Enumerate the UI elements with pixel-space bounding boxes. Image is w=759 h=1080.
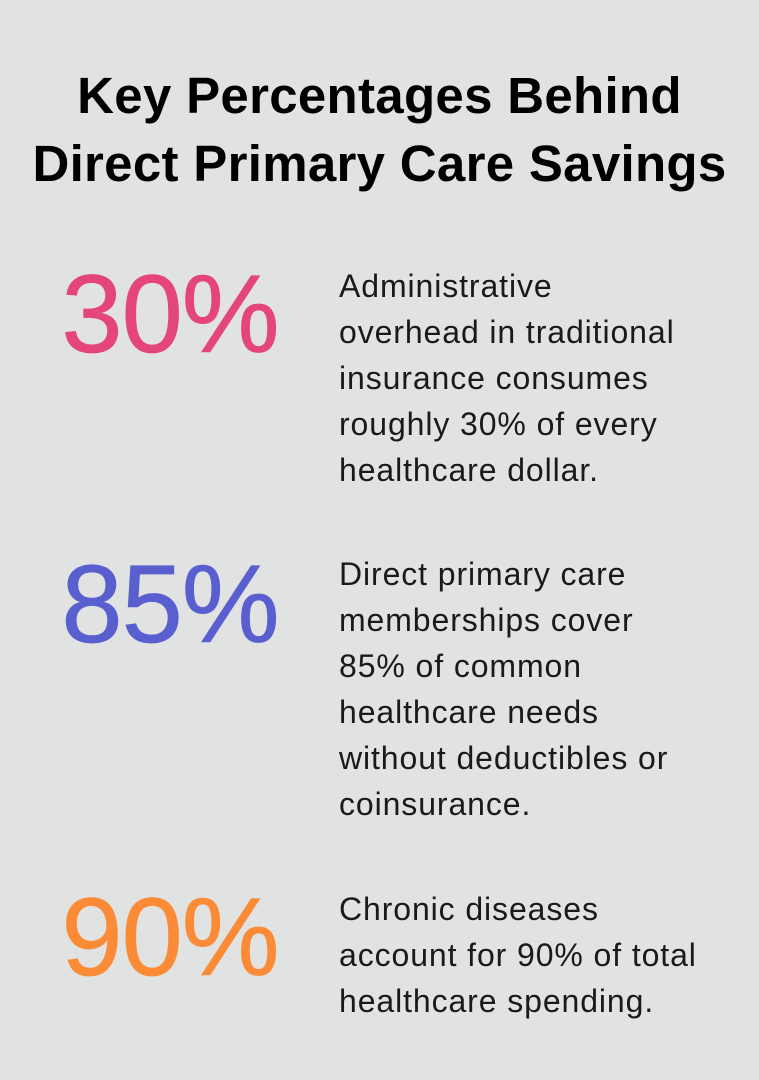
text: 85% description: memberships cover <box>339 602 634 638</box>
text: 90% description <box>339 891 697 1019</box>
text: 30% description <box>339 268 675 488</box>
text: 90% description: account for 90% of total <box>339 937 697 973</box>
text: 85% description: without deductibles or <box>339 740 668 776</box>
text: 85% description: 85% of common <box>339 648 582 684</box>
title <box>32 67 727 192</box>
stat: 85%: 85% <box>61 543 279 666</box>
text: 85% description <box>339 556 668 822</box>
text: 85% description: Direct primary care <box>339 556 626 592</box>
text: 85% description: coinsurance. <box>339 786 531 822</box>
text: 30% description: Administrative <box>339 268 553 304</box>
text: 30% description: insurance consumes <box>339 360 649 396</box>
text: 30% description: roughly 30% of every <box>339 406 658 442</box>
text: 30% description: overhead in traditional <box>339 314 675 350</box>
text: 90% description: Chronic diseases <box>339 891 599 927</box>
text: 90% description: healthcare spending. <box>339 983 654 1019</box>
stat: 90%: 90% <box>61 876 279 999</box>
stat: 30%: 30% <box>61 253 279 376</box>
text: 85% description: healthcare needs <box>339 694 599 730</box>
title: Direct Primary Care Savings <box>32 135 727 192</box>
title: Key Percentages Behind <box>77 67 682 124</box>
text: 30% description: healthcare dollar. <box>339 452 599 488</box>
